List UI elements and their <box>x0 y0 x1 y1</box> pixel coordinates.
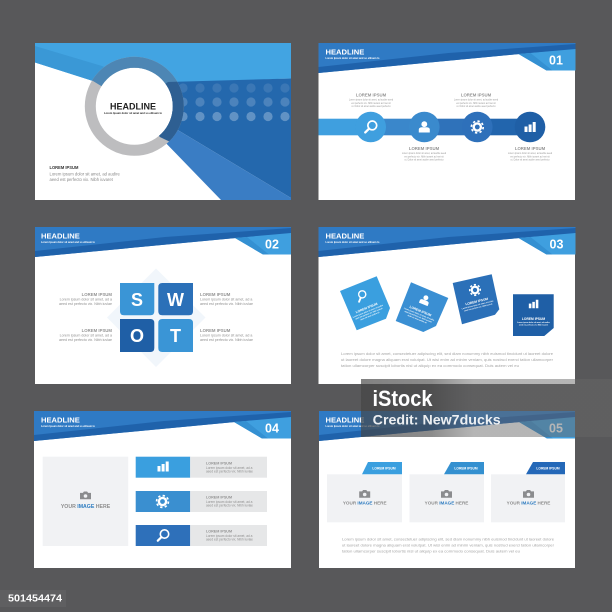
text top right: LOREM IPSUM <box>200 292 231 297</box>
image column one: YOUR IMAGE HERE <box>343 500 387 506</box>
label two: Lorem ipsum dolor sit amet, ad audire aeed <box>454 98 499 102</box>
cover caption <box>50 165 120 182</box>
dot grid <box>178 83 290 121</box>
panel: slide 01 timeline <box>318 43 576 200</box>
body paragraph <box>341 352 554 368</box>
label four <box>508 146 553 162</box>
label three: est perfecto vix. Nibh iuvaret ad mei sit <box>404 155 444 158</box>
row: search <box>136 525 267 546</box>
panel: slide 02 SWOT <box>35 227 291 384</box>
slide header: HEADLINE <box>326 48 364 56</box>
card: bars <box>513 294 554 336</box>
row: gear: aeed est perfecto vix. Nibh iuvlae <box>206 504 253 508</box>
image column two: LOREM IPSUM <box>454 466 478 470</box>
slide header: Lorem Ipsum dolor sit amet and so elitsum lo <box>41 241 95 244</box>
label two: LOREM IPSUM <box>461 92 492 98</box>
card: search: Lorem ipsum dolor sit amet, ad audire <box>352 304 384 319</box>
label four: LOREM IPSUM <box>515 146 546 151</box>
text top right: aeed est perfecto vix. Nibh iuvlae <box>200 302 253 306</box>
cover caption: LOREM IPSUM <box>50 165 79 170</box>
body paragraph: ut laoreet dolore magna aliquam erat volutpat. Ut wisi enim ad minim veniam, quis nostrud exerci tation ullamcorper <box>342 544 555 548</box>
slide header <box>318 227 576 257</box>
card: user: LOREM IPSUM <box>409 305 432 317</box>
card: user: Lorem ipsum dolor sit amet, ad audire <box>403 307 435 322</box>
slide header <box>34 411 291 441</box>
label one: est perfecto vix. Nibh iuvaret ad mei sit <box>351 102 391 105</box>
panel: slide 03 cards <box>318 227 576 384</box>
slide header: HEADLINE <box>41 416 80 424</box>
image column three: YOUR IMAGE HERE <box>507 500 550 506</box>
text top left: Lorem ipsum dolor sit amet, ad a <box>60 297 112 301</box>
text bottom right: LOREM IPSUM <box>200 328 231 333</box>
image column two: YOUR IMAGE HERE <box>425 500 468 506</box>
stock id <box>0 590 66 607</box>
card: search: LOREM IPSUM <box>355 302 378 314</box>
card: bars: LOREM IPSUM <box>522 317 545 321</box>
card: user: aeed est perfecto vix. Nibh iuvaret <box>404 310 433 324</box>
cover caption: aeed est perfecto vix. Nibh iuvaret <box>50 177 114 182</box>
image placeholder: YOUR IMAGE HERE <box>61 504 111 510</box>
slide header <box>35 227 291 257</box>
row: bars: aeed est perfecto vix. Nibh iuvlae <box>206 470 253 474</box>
image placeholder <box>43 457 128 546</box>
slide header: Lorem Ipsum dolor sit amet and so elitsum lo <box>326 425 380 428</box>
body paragraph: tation ullamcorper suscipit lobortis nisl ut aliquip ex ea commodo consequat. Duis autem vel eu <box>342 550 520 554</box>
step: search <box>355 112 386 142</box>
diamond backdrop <box>107 268 206 367</box>
slide header <box>319 411 575 441</box>
row: gear: LOREM IPSUM <box>206 496 232 500</box>
image column three <box>491 462 565 522</box>
image column three: LOREM IPSUM <box>536 466 560 470</box>
text top left: LOREM IPSUM <box>82 292 112 297</box>
text top right: Lorem ipsum dolor sit amet, ad a <box>200 297 252 301</box>
slide header: Lorem Ipsum dolor sit amet and so elitsum lo <box>326 57 380 60</box>
card: user <box>396 282 448 332</box>
image column one: LOREM IPSUM <box>372 466 396 470</box>
card: search: aeed est perfecto vix. Nibh iuvaret <box>355 307 383 321</box>
panel: slide 05 three images <box>319 411 575 568</box>
swot tile O: O <box>130 326 144 346</box>
body paragraph: Lorem ipsum dolor sit amet, consectetuer adipiscing elit, sed diam nonummy nibh euismod tincidunt ut laoreet dolore <box>341 352 553 356</box>
slide header: 05 <box>549 422 563 436</box>
card: search <box>340 276 390 330</box>
card: user: dolor sit amet audire ad <box>407 314 427 324</box>
label one: Lorem ipsum dolor sit amet, ad audire aeed <box>349 98 394 102</box>
body paragraph <box>342 538 555 554</box>
slide header: HEADLINE <box>326 416 364 424</box>
card: gear: LOREM IPSUM <box>465 297 489 306</box>
step: gear <box>462 112 493 142</box>
row: search: Lorem ipsum dolor sit amet, ad a <box>206 534 253 538</box>
body paragraph: Lorem ipsum dolor sit amet, consectetuer adipiscing elit, sed diam nonummy nibh euismod tincidunt ut laoreet dolore <box>342 538 554 542</box>
circle badge with headline <box>90 62 178 150</box>
body paragraph: tation ullamcorper suscipit lobortis nisl ut aliquip ex ea commodo consequat. Duis autem vel eu <box>341 364 519 368</box>
left diagonal band <box>35 46 115 81</box>
label three: ut. Dolor sit amet audire aeed perfecto <box>404 158 444 162</box>
mid blue band <box>160 129 291 200</box>
card: search: dolor sit amet audire ad <box>360 311 380 321</box>
row: search: aeed est perfecto vix. Nibh iuvlae <box>206 538 253 542</box>
swot tile T: T <box>170 326 181 346</box>
label two: est perfecto vix. Nibh iuvaret ad mei sit <box>456 102 496 105</box>
slide header: 04 <box>265 422 279 436</box>
text top left: aeed est perfecto vix. Nibh iuvlae <box>59 302 112 306</box>
text bottom right: aeed est perfecto vix. Nibh iuvlae <box>200 338 253 342</box>
text bottom left <box>59 328 112 342</box>
slide header: Lorem Ipsum dolor sit amet and so elitsum lo <box>326 241 380 244</box>
swot tile W <box>158 283 193 315</box>
light blue top band <box>35 43 291 83</box>
swot tile O <box>120 319 154 352</box>
slide header: HEADLINE <box>41 232 80 240</box>
label three: LOREM IPSUM <box>409 146 440 151</box>
swot tile T <box>158 319 193 352</box>
swot tile S <box>120 283 154 315</box>
label four: Lorem ipsum dolor sit amet, ad audire aeed <box>508 152 553 155</box>
dark blue wedge <box>134 78 291 198</box>
label four: est perfecto vix. Nibh iuvaret ad mei sit <box>510 155 550 158</box>
text top right <box>200 292 253 306</box>
text bottom left: aeed est perfecto vix. Nibh iuvlae <box>59 338 112 342</box>
text bottom left: Lorem ipsum dolor sit amet, ad a <box>60 333 112 337</box>
watermark <box>361 379 612 437</box>
swot tile S: S <box>131 290 143 310</box>
image column two <box>410 462 484 522</box>
slide header: HEADLINE <box>326 232 364 240</box>
watermark: iStock <box>372 386 433 411</box>
card: gear <box>453 274 499 324</box>
stock id: 501454474 <box>8 594 62 605</box>
label one: ut. Dolor sit amet audire aeed perfecto <box>351 105 391 108</box>
row: search: LOREM IPSUM <box>206 530 232 534</box>
label one: LOREM IPSUM <box>356 92 387 98</box>
card: gear: aeed est perfecto vix. Nibh iuvaret <box>464 302 493 312</box>
slide header: Lorem Ipsum dolor sit amet and so elitsum lo <box>41 425 95 428</box>
cover caption: Lorem ipsum dolor sit amet, ad audire <box>50 172 120 176</box>
circle badge with headline: HEADLINE <box>110 102 156 112</box>
label three: Lorem ipsum dolor sit amet, ad audire aeed <box>402 152 447 155</box>
text bottom right: Lorem ipsum dolor sit amet, ad a <box>200 333 252 337</box>
row: bars: LOREM IPSUM <box>206 462 232 466</box>
step: bars <box>515 112 545 142</box>
card: bars: Lorem ipsum dolor sit amet, ad audire <box>517 321 550 324</box>
label one <box>349 92 394 108</box>
circle badge with headline: Lorem Ipsum dolor sit amet and so elitsum lo <box>104 111 162 115</box>
panel: cover slide <box>35 43 291 200</box>
swot tile W: W <box>167 290 184 310</box>
slide header: 02 <box>265 238 279 252</box>
text top left <box>59 292 112 306</box>
body paragraph: ut laoreet dolore magna aliquam erat volutpat. Ut wisi enim ad minim veniam, quis nostrud exerci tation ullamcorper <box>341 358 554 362</box>
watermark: Credit: New7ducks <box>373 412 501 428</box>
row: bars: Lorem ipsum dolor sit amet, ad a <box>206 466 253 470</box>
timeline band <box>318 119 530 135</box>
step: user <box>409 112 440 142</box>
card: gear: Lorem ipsum dolor sit amet, ad audire <box>461 300 494 310</box>
panel: slide 04 image and rows <box>34 411 291 568</box>
slide header: 01 <box>549 54 563 68</box>
row: bars <box>136 457 267 478</box>
image column one <box>327 462 402 522</box>
text bottom left: LOREM IPSUM <box>82 328 112 333</box>
text bottom right <box>200 328 253 342</box>
label two <box>454 92 499 108</box>
label two: ut. Dolor sit amet audire aeed perfecto <box>456 105 496 108</box>
slide header: 03 <box>550 238 563 252</box>
row: gear <box>136 491 267 512</box>
card: bars: aeed est perfecto vix. Nibh iuvaret <box>519 324 548 327</box>
label three <box>402 146 447 162</box>
row: gear: Lorem ipsum dolor sit amet, ad a <box>206 500 253 504</box>
slide header <box>318 43 576 73</box>
label four: ut. Dolor sit amet audire aeed perfecto <box>510 158 550 162</box>
